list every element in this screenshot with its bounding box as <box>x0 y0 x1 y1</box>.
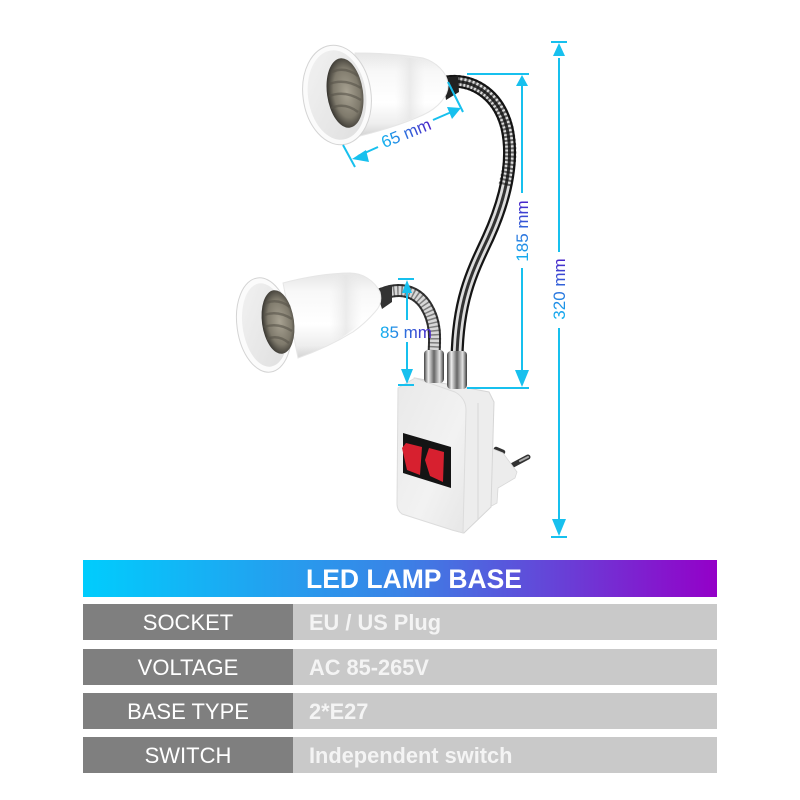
chrome collars <box>424 350 467 389</box>
spec row: voltage: AC 85-265V <box>309 655 429 680</box>
dimension: 320 mm: 320 mm <box>550 258 569 320</box>
long gooseneck arm <box>446 81 510 358</box>
spec row: voltage <box>83 649 717 685</box>
table title banner <box>83 560 717 597</box>
housing front <box>397 378 466 533</box>
spec row: base type: 2*E27 <box>309 699 368 724</box>
spec row: socket: EU / US Plug <box>309 610 441 635</box>
spec row: base type: BASE TYPE <box>127 699 249 724</box>
short gooseneck arm <box>378 291 435 354</box>
spec row: switch: SWITCH <box>145 743 231 768</box>
dimension: 85 mm: 85 mm <box>380 323 432 342</box>
spec row: voltage: VOLTAGE <box>138 655 238 680</box>
dimension: 185 mm: 185 mm <box>513 200 532 262</box>
spec row: switch: Independent switch <box>309 743 512 768</box>
EU plug pins <box>496 449 528 465</box>
spec row: socket <box>83 604 717 640</box>
table title banner: LED LAMP BASE <box>306 564 522 594</box>
dimension: 85 mm <box>380 279 432 385</box>
spec row: socket: SOCKET <box>143 610 233 635</box>
dimension: 65 mm: 65 mm <box>379 115 434 152</box>
dimension: 185 mm <box>467 74 532 388</box>
right red rocker <box>425 448 444 482</box>
left red rocker <box>402 443 422 475</box>
housing side <box>415 378 494 533</box>
spec row: base type <box>83 693 717 729</box>
upper lamp socket <box>296 41 448 149</box>
dimension: 320 mm <box>550 42 569 537</box>
lamp base housing with switches and plug <box>397 350 528 533</box>
spec row: switch <box>83 737 717 773</box>
neck joints <box>376 76 459 309</box>
lower lamp socket <box>231 273 381 376</box>
plug body <box>488 447 517 508</box>
dimension: 65 mm <box>343 82 463 167</box>
switch panel <box>403 433 451 488</box>
